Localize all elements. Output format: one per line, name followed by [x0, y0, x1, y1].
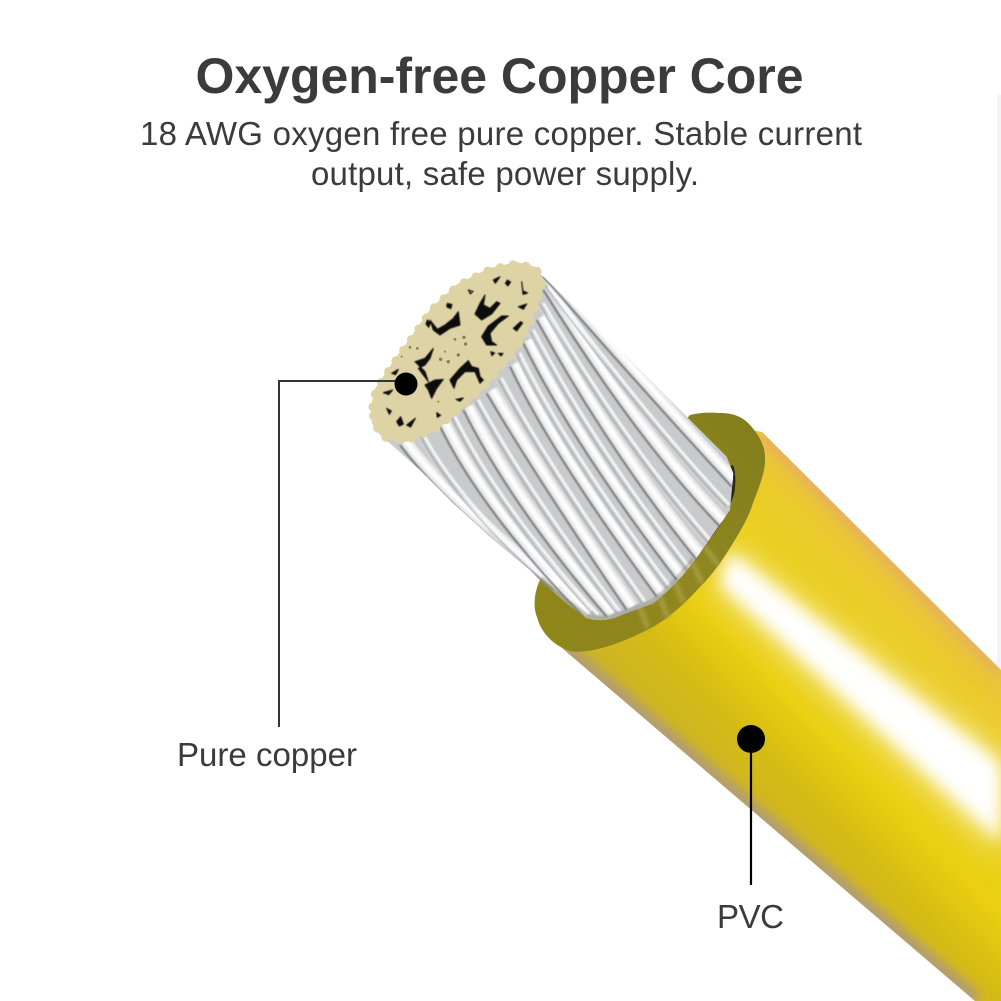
label: pure copper: Pure copper	[177, 736, 357, 773]
subtitle: output, safe power supply.	[311, 155, 699, 192]
copper cross-section	[373, 264, 542, 440]
subtitle	[140, 115, 862, 192]
title: Oxygen-free Copper Core	[196, 48, 804, 104]
marker dot	[737, 725, 765, 753]
callout: pure copper	[279, 372, 418, 727]
strand gaps	[383, 277, 528, 427]
subtitle: 18 AWG oxygen free pure copper. Stable current	[140, 115, 862, 152]
illustration: stripped wire	[373, 264, 1001, 1001]
callout: PVC	[737, 725, 765, 885]
label: PVC: PVC	[717, 898, 784, 935]
marker dot	[394, 372, 418, 396]
silver strands	[380, 270, 740, 630]
jacket end ring	[535, 413, 765, 652]
PVC jacket	[540, 420, 1001, 1001]
